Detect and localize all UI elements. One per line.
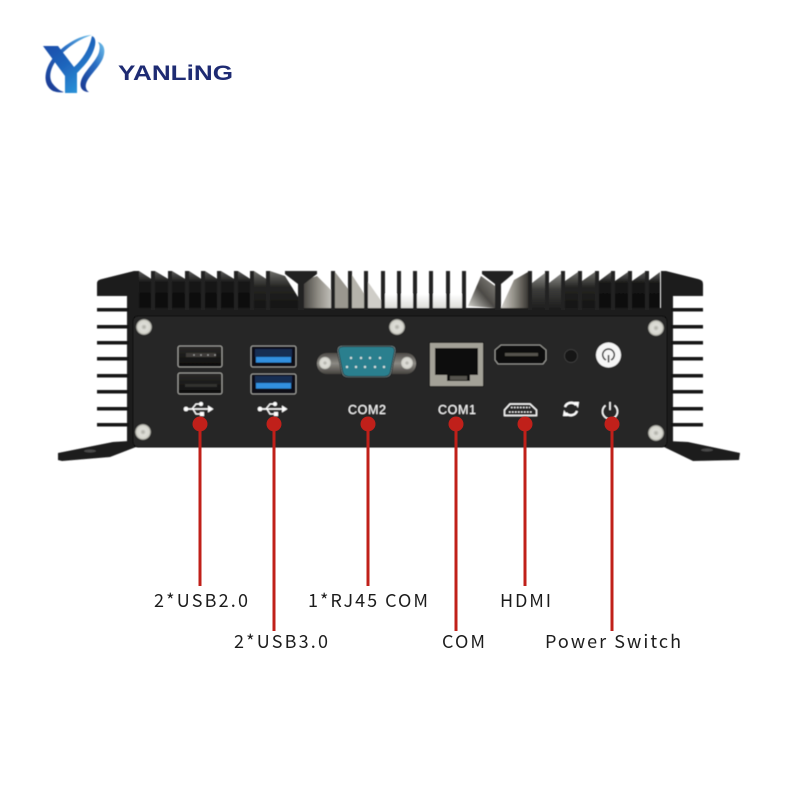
reset hole [564, 350, 578, 362]
label: COM2 on panel: COM2 [348, 403, 386, 417]
top fin gaps shading [139, 271, 660, 310]
screws [135, 319, 664, 441]
icon: USB symbol 2 [258, 402, 288, 416]
device: fanless mini PC front [58, 271, 740, 461]
HDMI port [495, 345, 546, 364]
2x USB 2.0 ports [178, 346, 222, 394]
logo wordmark: YANLiNG [118, 62, 233, 85]
RJ45 COM1 port [430, 342, 484, 386]
heatsink outline body [97, 271, 703, 447]
label: 1*RJ45 COM: 1*RJ45 COM [308, 587, 428, 613]
icon: Y swoosh mark [43, 35, 104, 93]
icon: USB symbol 1 [184, 402, 214, 416]
leader: USB 3.0 [266, 416, 282, 631]
label: Power Switch: Power Switch [545, 628, 681, 654]
leader: USB 2.0 [192, 416, 208, 586]
logo: Yanling [43, 35, 233, 93]
leader: RJ45 COM [360, 416, 376, 586]
label: COM: COM [442, 628, 485, 654]
2x USB 3.0 ports [251, 346, 296, 394]
right side fins [671, 308, 703, 426]
right mounting foot [664, 441, 740, 461]
leader: Power Switch [604, 416, 620, 631]
left mounting foot [58, 441, 136, 461]
icon: power symbol [602, 402, 618, 419]
label: 2*USB3.0: 2*USB3.0 [234, 628, 328, 654]
icon: HDMI symbol [504, 404, 536, 416]
leader: COM [448, 416, 464, 631]
label: HDMI: HDMI [500, 587, 551, 613]
left side fins [97, 308, 129, 426]
icon: reset arrows [563, 402, 579, 416]
top fins [151, 271, 649, 310]
power button [596, 342, 621, 368]
front panel [133, 316, 667, 447]
label: COM1 on panel: COM1 [438, 403, 476, 417]
callout leader lines [192, 416, 620, 631]
COM2 serial port [317, 346, 416, 377]
leader: HDMI [518, 416, 532, 586]
label: 2*USB2.0: 2*USB2.0 [154, 587, 248, 613]
